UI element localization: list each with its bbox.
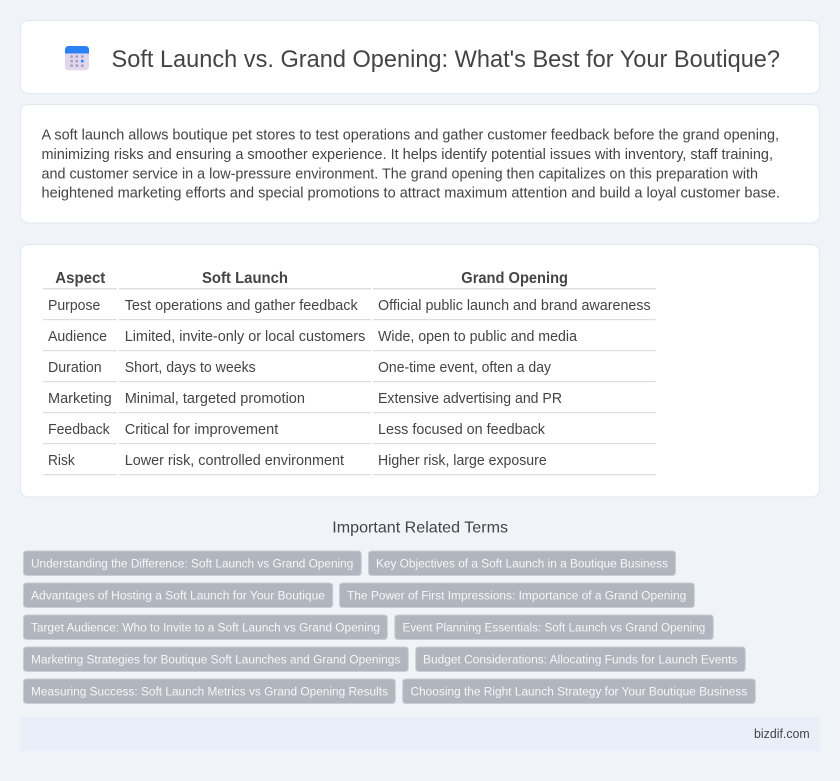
table header row: Soft Launch [202, 270, 288, 287]
row: Duration: Duration [48, 360, 102, 376]
tag: Target Audience: Who to Invite to a Soft Launch vs Grand Opening [31, 620, 380, 634]
panel: header [20, 20, 820, 94]
row: Audience [43, 329, 656, 351]
row: Audience: Limited, invite-only or local customers [125, 329, 365, 345]
row: Risk: Risk [48, 453, 75, 469]
summary text [42, 127, 780, 201]
row: Marketing: Marketing [48, 391, 112, 407]
footer [20, 717, 820, 751]
row: Risk: Higher risk, large exposure [378, 453, 547, 469]
row: Purpose: Official public launch and brand awareness [378, 298, 651, 314]
row: Feedback: Feedback [48, 422, 110, 438]
row: Purpose [43, 298, 656, 320]
tag: Budget Considerations: Allocating Funds for Launch Events [423, 652, 737, 666]
row: Marketing [43, 391, 656, 413]
row: Risk: Lower risk, controlled environment [125, 453, 344, 469]
tag [340, 583, 694, 608]
tag: Measuring Success: Soft Launch Metrics vs Grand Opening Results [31, 684, 388, 698]
table header row [43, 270, 656, 289]
tag [24, 615, 387, 640]
row: Feedback [43, 422, 656, 444]
row: Duration: One-time event, often a day [378, 360, 552, 376]
tag [395, 615, 713, 640]
row: Feedback: Less focused on feedback [378, 422, 546, 438]
row: Audience: Audience [48, 329, 107, 345]
tag: The Power of First Impressions: Importance of a Grand Opening [347, 588, 686, 602]
tag [24, 647, 408, 672]
row: Risk [43, 453, 656, 475]
summary text: and customer service in a low-pressure environment. The grand opening then capitalizes on this preparation with [42, 166, 758, 182]
tag list: related terms [24, 551, 755, 704]
summary text: minimizing risks and ensuring a smoother experience. It helps identify potential issues with inventory, staff training, [42, 147, 773, 163]
row: Marketing: Minimal, targeted promotion [125, 391, 305, 407]
tag [416, 647, 745, 672]
row: Feedback: Critical for improvement [125, 422, 278, 438]
summary text: A soft launch allows boutique pet stores to test operations and gather customer feedback before the grand opening, [42, 127, 779, 143]
tag: Choosing the Right Launch Strategy for Your Boutique Business [410, 684, 747, 698]
row: Marketing: Extensive advertising and PR [378, 391, 562, 407]
tag: Marketing Strategies for Boutique Soft Launches and Grand Openings [31, 652, 400, 666]
summary text: heightened marketing efforts and special promotions to attract maximum attention and build a loyal customer base. [42, 185, 780, 201]
row: Duration: Short, days to weeks [125, 360, 256, 376]
row: Purpose: Test operations and gather feedback [125, 298, 358, 314]
tag: Key Objectives of a Soft Launch in a Boutique Business [376, 556, 668, 570]
icon: calendar [65, 46, 89, 70]
tag: Understanding the Difference: Soft Launch vs Grand Opening [31, 556, 353, 570]
panel: summary [20, 104, 820, 223]
tag [24, 551, 361, 576]
tag [403, 679, 755, 704]
tag: Event Planning Essentials: Soft Launch vs Grand Opening [402, 620, 705, 634]
title: Soft Launch vs. Grand Opening: What's Best for Your Boutique? [112, 46, 780, 73]
tag [24, 679, 395, 704]
footer source: bizdif.com [754, 726, 810, 741]
heading: related terms: Important Related Terms [332, 520, 508, 537]
panel: comparison table [20, 244, 820, 497]
tag [368, 551, 676, 576]
row: Duration [43, 360, 656, 382]
row: Purpose: Purpose [48, 298, 100, 314]
table header row: Grand Opening [461, 270, 568, 287]
row: Audience: Wide, open to public and media [378, 329, 578, 345]
table header row: Aspect [55, 270, 106, 287]
tag: Advantages of Hosting a Soft Launch for Your Boutique [31, 588, 325, 602]
tag [24, 583, 333, 608]
